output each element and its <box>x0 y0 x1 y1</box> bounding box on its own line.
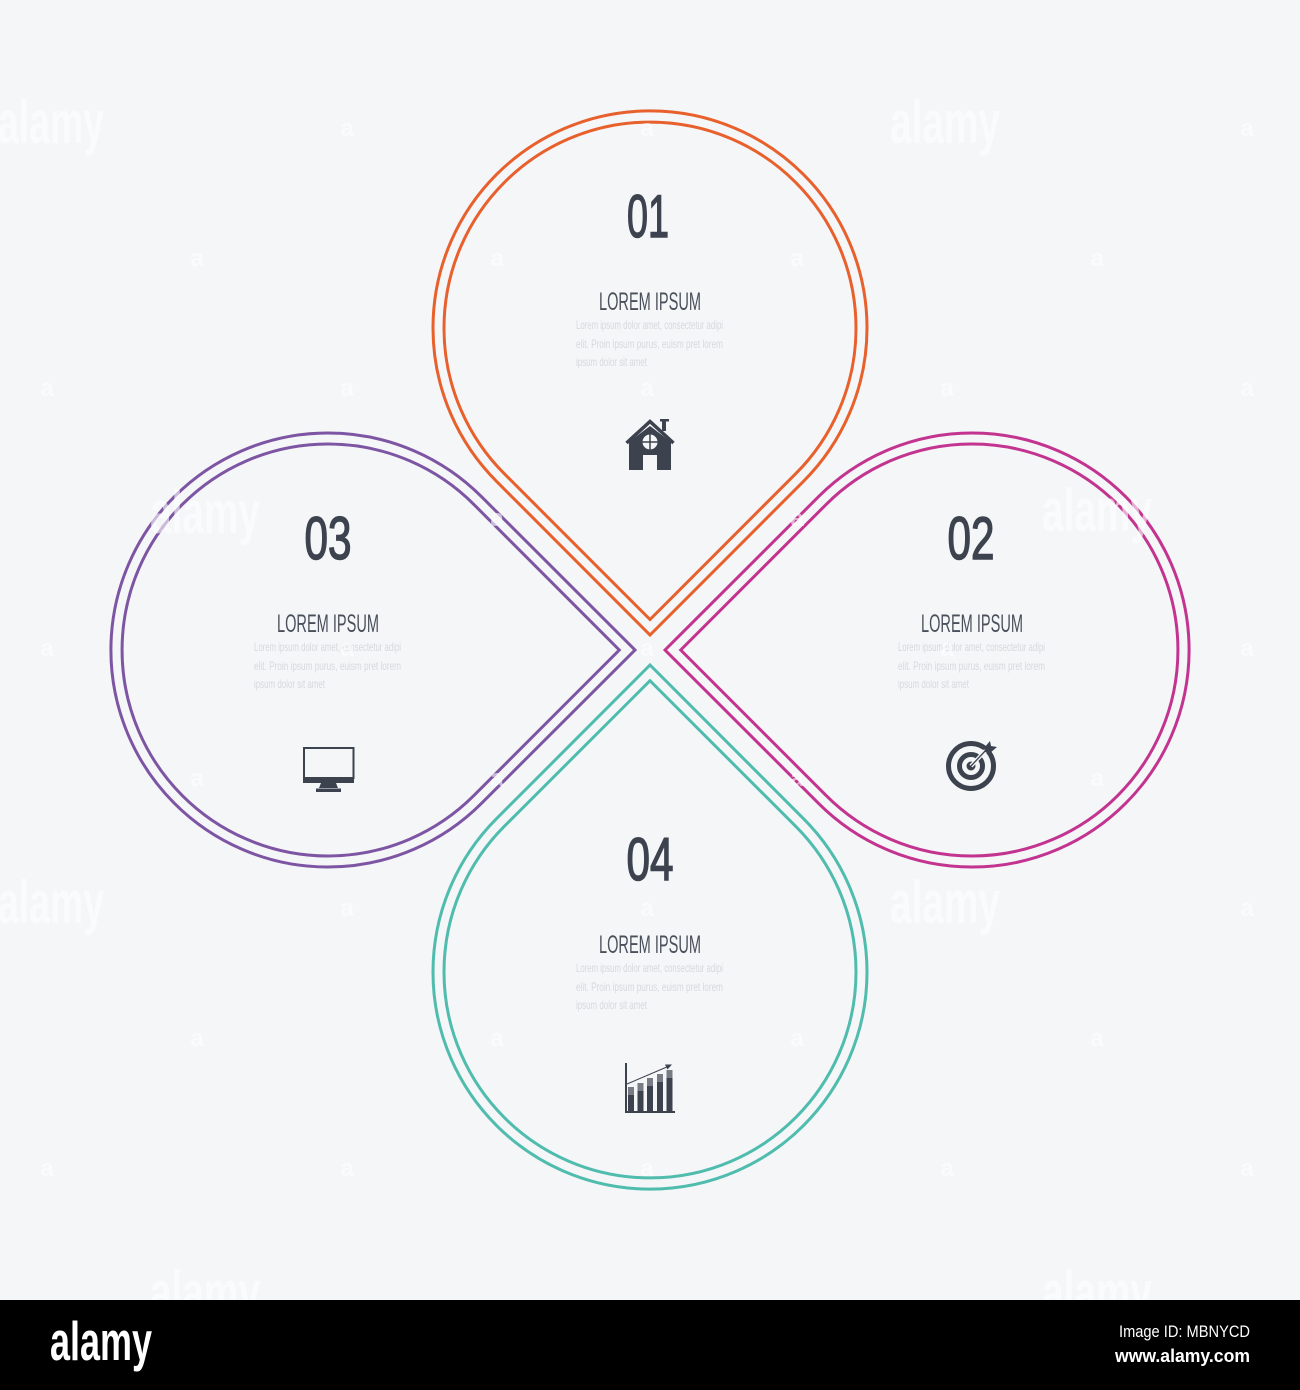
number 01: 01 <box>627 183 669 250</box>
teardrop outline: magenta <box>665 433 1189 867</box>
body text 03 <box>254 640 401 691</box>
text: a <box>790 245 804 272</box>
text: a <box>190 1025 204 1052</box>
text: a <box>40 635 54 662</box>
teardrop outline: purple <box>111 433 635 867</box>
text: a <box>940 1155 954 1182</box>
heading 04: LOREM IPSUM <box>599 931 701 959</box>
body text 04: elit. Proin ipsum purus, euism pret lorem <box>576 980 723 994</box>
heading 03: LOREM IPSUM <box>277 610 379 638</box>
number 02: 02 <box>948 505 994 572</box>
panel 01: orange teardrop <box>433 111 867 635</box>
text: a <box>640 1155 654 1182</box>
body text 03: Lorem ipsum dolor amet, consectetur adipi <box>254 640 401 654</box>
body text 03: ipsum dolor sit amet <box>254 677 325 691</box>
text: a <box>790 1025 804 1052</box>
body text 02: Lorem ipsum dolor amet, consectetur adipi <box>898 640 1045 654</box>
text: alamy <box>1042 1259 1152 1326</box>
body text 02 <box>898 640 1045 691</box>
text: a <box>1240 115 1254 142</box>
text: a <box>340 895 354 922</box>
text: a <box>790 765 804 792</box>
text: a <box>490 1025 504 1052</box>
panel 03: purple teardrop <box>111 433 635 867</box>
text: a <box>1240 375 1254 402</box>
text: a <box>940 375 954 402</box>
text: a <box>640 895 654 922</box>
text: a <box>340 635 354 662</box>
footer logo: alamy <box>50 1310 152 1372</box>
text: alamy <box>0 89 104 156</box>
body text 02: ipsum dolor sit amet <box>898 677 969 691</box>
text: a <box>190 245 204 272</box>
text: a <box>340 115 354 142</box>
body text 02: elit. Proin ipsum purus, euism pret lorem <box>898 659 1045 673</box>
panel 04: teal teardrop <box>433 665 867 1189</box>
body text 01: Lorem ipsum dolor amet, consectetur adipi <box>576 318 723 332</box>
icon: house <box>626 419 674 470</box>
text: a <box>490 505 504 532</box>
text: a <box>640 635 654 662</box>
text: a <box>640 115 654 142</box>
text: alamy <box>150 1259 260 1326</box>
text: a <box>40 1155 54 1182</box>
text: a <box>640 375 654 402</box>
teardrop outline: teal <box>433 665 867 1189</box>
text: a <box>340 375 354 402</box>
text: a <box>1240 895 1254 922</box>
website: www.alamy.com <box>1114 1346 1250 1366</box>
text: a <box>340 1155 354 1182</box>
text: a <box>1090 1025 1104 1052</box>
number 04: 04 <box>626 826 674 893</box>
body text 04: ipsum dolor sit amet <box>576 998 647 1012</box>
icon: monitor <box>303 748 354 792</box>
text: alamy <box>890 869 1000 936</box>
text: alamy <box>150 479 260 546</box>
body text 01: ipsum dolor sit amet <box>576 355 647 369</box>
image id: Image ID: MBNYCD <box>1119 1322 1250 1341</box>
heading 02: LOREM IPSUM <box>921 610 1023 638</box>
text: a <box>940 635 954 662</box>
body text 01 <box>576 318 723 369</box>
text: a <box>1090 765 1104 792</box>
teardrop outline: orange <box>433 111 867 635</box>
text: alamy <box>890 89 1000 156</box>
footer bar <box>0 1300 1300 1390</box>
text: a <box>490 765 504 792</box>
heading 01: LOREM IPSUM <box>599 288 701 316</box>
text: a <box>790 505 804 532</box>
text: alamy <box>1042 477 1152 544</box>
text: a <box>490 245 504 272</box>
icon: bar chart <box>625 1063 675 1113</box>
number 03: 03 <box>304 505 352 572</box>
text: a <box>40 375 54 402</box>
body text 04: Lorem ipsum dolor amet, consectetur adipi <box>576 961 723 975</box>
text: a <box>190 765 204 792</box>
body text 03: elit. Proin ipsum purus, euism pret lorem <box>254 659 401 673</box>
body text 04 <box>576 961 723 1012</box>
body text 01: elit. Proin ipsum purus, euism pret lorem <box>576 337 723 351</box>
text: a <box>1240 635 1254 662</box>
text: a <box>1090 245 1104 272</box>
text: alamy <box>0 869 104 936</box>
icon: target <box>948 741 997 788</box>
panel 02: magenta teardrop <box>665 433 1189 867</box>
text: a <box>1240 1155 1254 1182</box>
